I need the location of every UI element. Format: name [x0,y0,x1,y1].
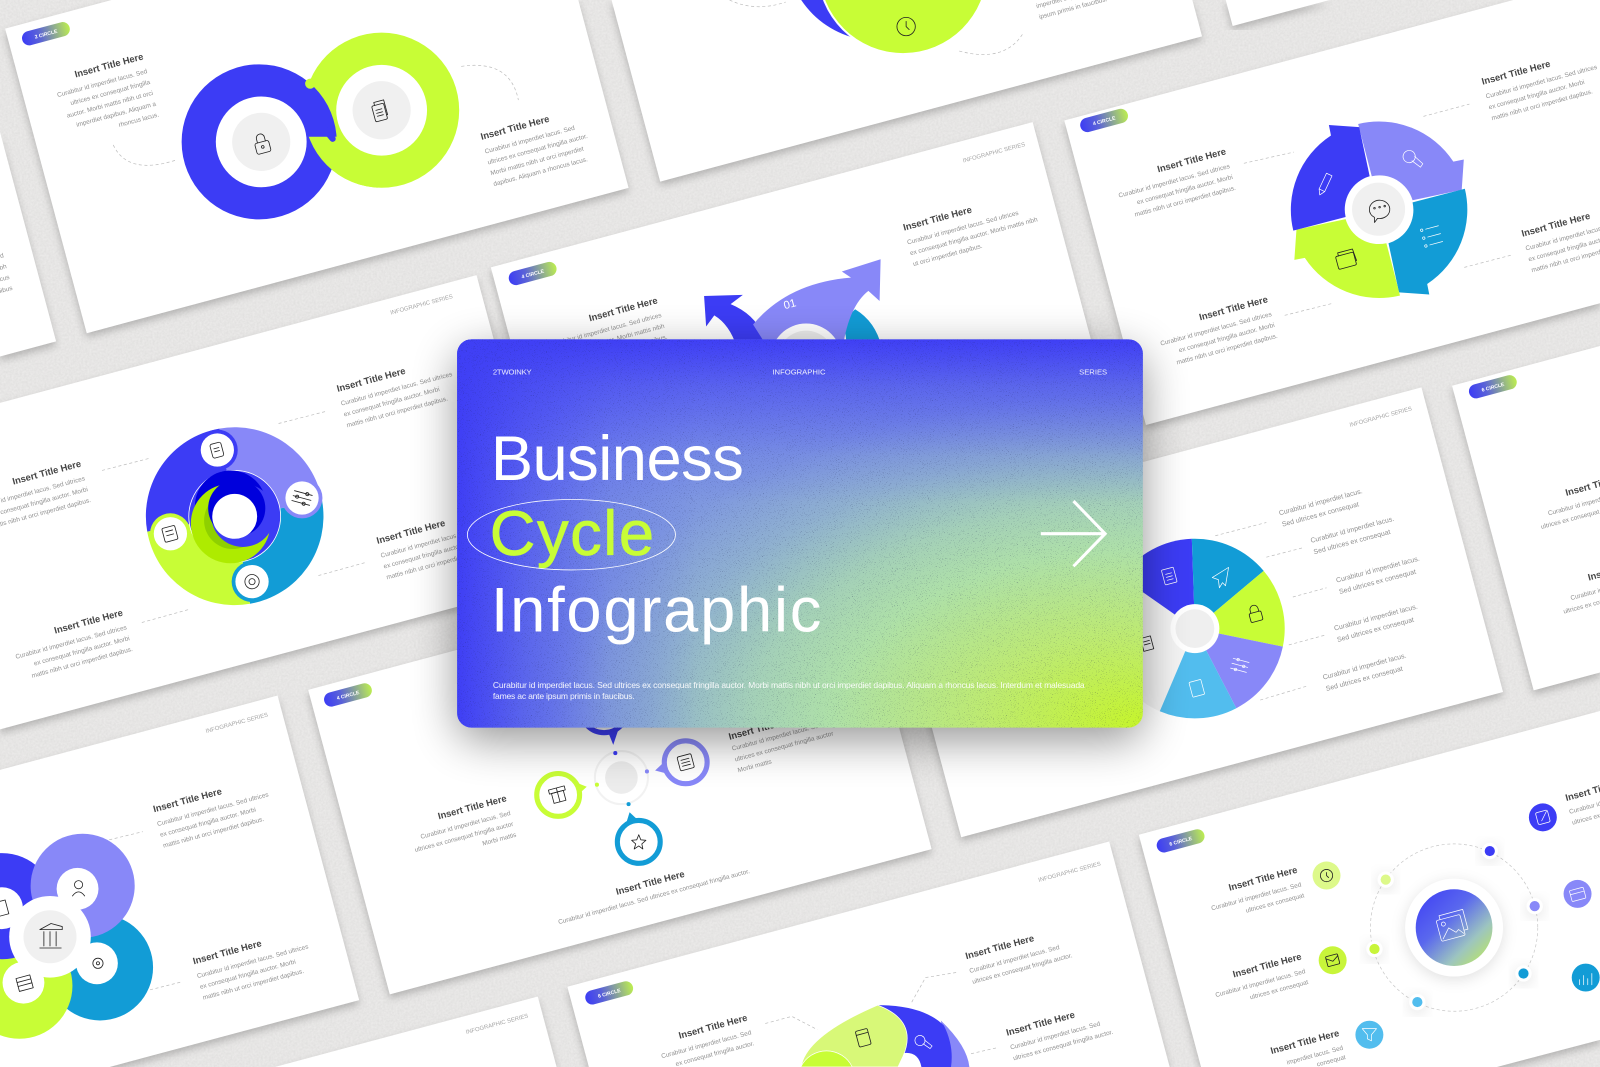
text block: lower right: Curabitur id imperdiet lacus. Sed ultrices [380,523,493,560]
text block: right upper [964,925,1073,986]
text block: bottom: Insert Title Here [615,869,686,897]
text block: right lower: ultrices ex consequat fringilla auctor. [1012,1029,1114,1062]
text block: left: Curabitur id imperdiet lacus. Sed ultrices [549,312,662,349]
text block: upper [1533,470,1600,531]
text block: upper right: ex consequat fringilla auctor. Morbi [343,386,441,418]
text block: lower left: Insert Title Here [1198,294,1269,322]
icon: folder [1335,249,1358,270]
text block: right [902,189,1042,268]
text block: right: ex consequat fringilla auctor. Morbi mattis nibh [909,216,1039,257]
panel: swirl slide [0,275,558,729]
badge: 6 circle: 6 CIRCLE [1169,836,1193,848]
text block: right: ut orci imperdiet dapibus. [912,243,983,268]
text block: left [52,51,160,142]
icon: documents [210,442,224,459]
icon: bank [40,924,62,948]
header: brand: 2TWOINKY [493,368,532,377]
text block: right lower: Curabitur id imperdiet lacus. Sed [1010,1021,1102,1051]
text block: lower left: mattis nibh ut orci imperdiet dapibus. [31,646,134,680]
badge: 4 circle: 4 CIRCLE [521,268,545,280]
text block: upper: Curabitur id imperdiet lacus. Sed ultrices [156,791,269,828]
badge: 2 circle: 2 CIRCLE [34,29,59,41]
chart: swirl wheel [146,427,323,605]
text block: item 5: Sed ultrices ex consequat [1325,666,1404,693]
icon: sliders [291,489,313,507]
chart: interlocked rings [182,33,459,219]
icon: people [72,881,85,896]
text block: right lower [1005,1001,1114,1062]
text block: lower left: Curabitur id imperdiet lacus. Sed ultrices [1160,311,1273,348]
badge: 4 circle [322,682,373,708]
text block: right: Insert Title Here [728,714,798,742]
header: category: INFOGRAPHIC [772,368,826,377]
text block: left: Morbi mattis [482,832,517,847]
panel: far left slide [0,132,56,356]
panel: pins slide [308,545,932,994]
paragraph: Curabitur id imperdiet lacus. Sed ultrices ex consequat fringilla auctor. Morbi mattis nibh ut orci imperdiet dapibus. Aliquam a rhoncus lacus. Interdum et malesuada [493,680,1085,690]
text block: upper right: Curabitur id imperdiet lacus. Sed ultrices [1485,64,1598,100]
text block: upper right [1481,47,1600,122]
text block: upper right: ex consequat fringilla auctor. Morbi [1488,79,1585,111]
badge: 6 circle [1155,828,1206,854]
text block: right: ultrices ex consequat fringilla auctor [734,730,835,763]
icon: edit badge [1529,803,1557,831]
badge: 2 circle [20,20,71,47]
text block: lower left: ex consequat fringilla auctor. Morbi [1178,322,1275,354]
text block: lower right: Insert Title Here [375,518,446,546]
text block: item 3 [1335,556,1424,596]
text block: item 3: Curabitur id imperdiet lacus. [1335,556,1421,585]
text block: right: Insert Title Here [480,114,550,142]
badge: 4 circle: 4 CIRCLE [1092,115,1117,127]
text block: item 2 [1210,951,1310,1010]
icon: clock [897,17,915,36]
text block: left: auctor. Morbi mattis nibh ut orci [66,90,154,120]
chart: orbit diagram [1313,803,1600,1049]
badge: 6 circle [584,980,635,1006]
icon: pictures [1435,909,1469,941]
icon: note [1189,679,1205,697]
icon: list [677,754,694,771]
panel: 4 circle arrows slide [491,122,1114,572]
icon: paper plane [1212,567,1229,588]
text block: upper [152,775,275,850]
text block: left: Curabitur id imperdiet lacus. Sed [57,68,149,99]
chart: pie wheel [1105,539,1285,718]
text block: upper left [0,459,92,534]
label: infographic series: INFOGRAPHIC SERIES [205,712,269,735]
text block: right: Morbi mattis nibh ut orci imperdiet [490,146,585,177]
icon: box badge [1564,880,1592,908]
icon: filter badge [1355,1021,1383,1049]
text block: left: imperdiet dapibus. Aliquam a [76,101,157,129]
text block: right [480,105,595,188]
icon: bulb [913,1034,934,1050]
text block: item 3 [1269,1028,1347,1067]
icon: eye [93,958,103,968]
icon: lock [1247,604,1263,623]
text block: right: ultrices ex consequat fringilla auctor. [487,133,589,166]
text block: lower right: mattis nibh ut orci imperdiet dapibus. [386,548,489,581]
panel: flower slide [0,696,359,1067]
panel: top centre slide [612,0,1202,182]
badge: 6 circle: 6 CIRCLE [597,988,622,1000]
text block: item 1: ultrices ex consequat [1245,892,1305,915]
icon: speech bubble [1369,200,1390,222]
label: infographic series: INFOGRAPHIC SERIES [1038,861,1102,884]
text block: lower right: ex consequat fringilla auctor. Morbi [383,538,480,570]
text block: lower: Insert Title Here [192,938,263,966]
text block: item 1: Curabitur id imperdiet lacus. [1278,488,1363,517]
text block: item 1 [1206,865,1305,923]
panel: title card [457,339,1143,728]
badge: 4 circle [1079,107,1130,134]
text block: lower right [375,506,499,581]
text block: lower left: Insert Title Here [53,608,124,636]
text block: upper left: Insert Title Here [11,459,82,487]
text block: item 1: Sed ultrices ex consequat [1281,501,1360,529]
text block: upper left [1113,146,1237,221]
paragraph: fames ac ante ipsum primis in faucibus. [493,691,635,701]
icon: chart badge [1572,964,1600,992]
panel: orbit slide [1139,711,1600,1067]
text block: item 4: Curabitur id imperdiet lacus. [1333,603,1419,633]
text block: upper right: Insert Title Here [1481,59,1551,87]
text block: upper right: mattis nibh ut orci imperdiet dapibus. [1491,88,1594,122]
icon: note [162,525,178,542]
icon: calendar [16,975,33,991]
icon: clock badge [1313,862,1341,890]
text block: item 5 [1322,652,1410,693]
text block: right: Morbi mattis [737,758,773,774]
text block: left: Insert Title Here [678,1013,748,1041]
text block: lower left [10,608,134,683]
chart: cropped swirl [801,1005,969,1067]
heading: business: Business [491,424,744,494]
text block: lower left: mattis nibh ut orci imperdiet dapibus. [1176,333,1279,366]
label: infographic series: INFOGRAPHIC SERIES [465,1013,529,1036]
text block: lower left: ex consequat fringilla auctor. Morbi [33,635,131,668]
panel: pie slide [880,387,1503,837]
icon: document [1161,567,1177,585]
text block: item 2: ultrices ex consequat [1249,979,1309,1001]
text block: lower right: Insert Title Here [1520,211,1591,239]
text block: upper right: Insert Title Here [336,366,407,394]
text block: left: ultrices ex consequat fringilla auctor [414,821,515,854]
text block: item 2: Insert Title Here [1232,951,1303,979]
badge: 6 circle [1467,374,1518,400]
panel: far right slide [1452,346,1600,690]
icon: list [1140,636,1154,651]
text block: left: Insert Title Here [437,793,508,821]
paragraph [493,680,1085,701]
text block: upper right [336,354,459,429]
text block: upper right: mattis nibh ut orci imperdiet dapibus. [346,395,449,429]
text block: item 1: Insert Title Here [1228,865,1298,893]
icon: message badge [1319,946,1347,974]
heading: cycle: Cycle [490,499,654,569]
chart: curved arrows [704,259,882,395]
text block: left: rhoncus lacus. [118,111,160,129]
panel: top corner slide [1226,0,1330,26]
text block: left: Curabitur id imperdiet lacus. Sed [661,1029,753,1060]
text block: upper: ex consequat fringilla auctor. Morbi [159,806,257,839]
text block: right upper: Curabitur id imperdiet lacus. Sed [969,944,1061,975]
icon: jar [855,1028,871,1047]
text block: lower right [1520,199,1600,274]
text block: right: Insert Title Here [902,205,973,233]
text block: item 2: Sed ultrices ex consequat [1313,529,1391,556]
text block: item 2: Curabitur id imperdiet lacus. [1310,516,1395,545]
text block: item 2: Curabitur id imperdiet lacus. Sed [1215,968,1307,999]
text block: bottom: Curabitur id imperdiet lacus. Sed ultrices ex consequat fringilla auctor. [558,868,751,926]
text block: lower left [1155,294,1279,369]
text block: upper: mattis nibh ut orci imperdiet dapibus. [162,816,265,850]
text block: right: dapibus. Aliquam a rhoncus lacus. [493,156,589,188]
text block: upper left: mattis nibh ut orci imperdiet dapibus. [1134,185,1237,219]
text block: left: ultrices ex consequat fringilla [70,79,151,107]
text block: left: Insert Title Here [74,51,144,79]
label: infographic series: INFOGRAPHIC SERIES [1349,406,1413,429]
chart: overlapping circles [0,834,153,1039]
label: 01: 01 [782,297,798,312]
text block: item 3: Sed ultrices ex consequat [1338,569,1417,596]
text block: item 2 [1310,516,1398,556]
chart: pin circles [537,686,707,863]
icon: document [0,900,9,916]
text block: item 3: imperdiet lacus. Sed [1286,1045,1344,1066]
icon: list [1420,225,1443,248]
icon: gift [548,786,568,804]
text block: right lower: Insert Title Here [1005,1010,1076,1038]
card shadow [457,352,1143,740]
text block: left [656,1013,755,1067]
text block: right: Curabitur id imperdiet lacus. Sed [484,125,576,156]
icon: bulb [1401,149,1426,168]
text block: upper left: Curabitur id imperdiet lacus. Sed ultrices [1118,163,1231,200]
text block: item 4 [1333,603,1422,644]
chart: arrow wheel [1291,121,1467,298]
text block: upper left: ex consequat fringilla auctor. Morbi [1136,174,1234,206]
text block: left: ex consequat fringilla auctor. Morbi mattis nibh [536,323,666,364]
ellipse around cycle [467,500,676,570]
arrow [1041,501,1105,566]
panel: 2 circle slide [5,0,629,333]
header: series: SERIES [1079,368,1107,377]
heading: infographic: Infographic [491,576,821,646]
text block: right upper: ultrices ex consequat fringilla auctor. [972,952,1073,986]
text block: lower [192,927,315,1002]
text block: lower: Curabitur id imperdiet lacus. Sed ultrices [196,944,309,980]
text block: item 1 [1278,488,1366,529]
icon: lock [252,132,271,155]
text block: upper left: Insert Title Here [1156,146,1227,174]
text block: left [407,793,518,865]
text block: item 1: Curabitur id imperdiet lacus. Sed [1211,881,1303,912]
text block: right: Curabitur id imperdiet lacus. Sed ultrices [906,210,1019,246]
panel: bottom centre slide [567,841,1170,1067]
text block: left: Curabitur id imperdiet lacus. Sed [420,810,512,841]
text block: item 3: Insert Title Here [1269,1028,1340,1056]
text block: upper: Insert Title Here [152,786,223,814]
icon: sliders [1230,657,1249,674]
text block: lower: ex consequat fringilla auctor. Morbi [199,959,297,991]
label: infographic series: INFOGRAPHIC SERIES [962,142,1026,165]
icon: star [632,835,646,849]
label: infographic series: INFOGRAPHIC SERIES [390,294,454,317]
icon: gear [245,575,259,589]
text block: left: ut orci imperdiet dapibus. [597,334,668,359]
chart: cropped circle [786,0,989,55]
badge: 6 circle: 6 CIRCLE [1481,382,1506,394]
text block: left [529,295,669,375]
badge: 4 circle [507,260,558,287]
text block: right upper: Insert Title Here [964,933,1035,961]
icon: pencil [1317,173,1332,196]
text block: lower left: Curabitur id imperdiet lacus. Sed ultrices [15,624,128,661]
text block: right [728,706,838,774]
text block: lower: mattis nibh ut orci imperdiet dapibus. [202,968,305,1002]
panel: 4 circle arrow wheel slide [1064,0,1600,425]
icon: documents [371,100,389,122]
text block: upper right: Curabitur id imperdiet lacus. Sed ultrices [340,371,453,408]
text block: lower [1555,554,1600,616]
text block: right: Curabitur id imperdiet lacus. Sed [731,722,823,753]
text block: item 5: Curabitur id imperdiet lacus. [1322,652,1407,682]
text block: item 4: Sed ultrices ex consequat [1336,617,1415,644]
text block: item 4 [1564,769,1600,827]
panel: bottom left slide [275,997,557,1067]
badge: 4 circle: 4 CIRCLE [336,690,361,702]
text block: left: Insert Title Here [588,295,659,323]
